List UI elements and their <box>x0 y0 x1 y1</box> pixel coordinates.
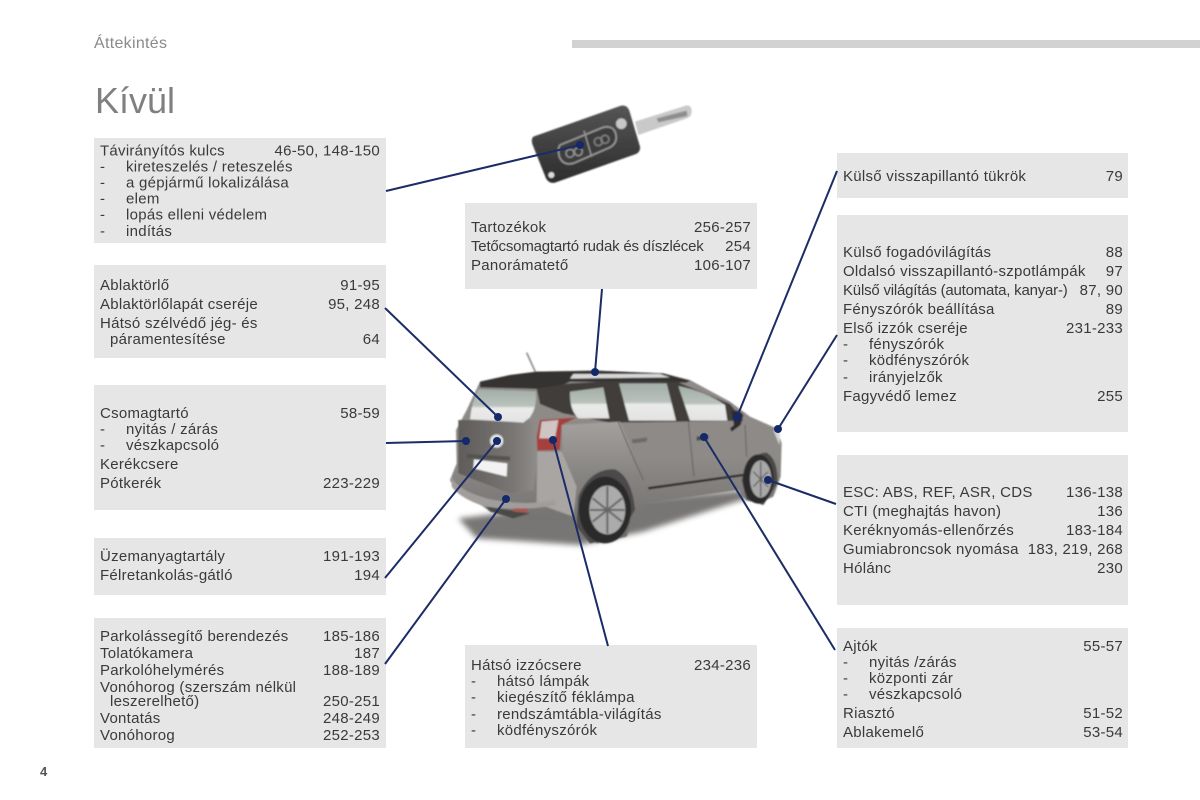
panel: lighting: 88 <box>1106 244 1123 261</box>
panel: rear bulbs: - <box>471 722 476 739</box>
door lines <box>618 422 747 480</box>
panel: lighting: Fagyvédő lemez <box>843 388 957 405</box>
panel: doors: 51-52 <box>1083 705 1123 722</box>
panel: mirrors: 79 <box>1106 168 1123 185</box>
panel: lighting: - <box>843 352 848 369</box>
panel: safety systems: Keréknyomás-ellenőrzés <box>843 522 1014 539</box>
panel: boot: Pótkerék <box>100 475 162 492</box>
panel: accessories: 106-107 <box>694 257 751 274</box>
panel: remote key: Távirányítós kulcs <box>100 142 225 160</box>
panel: rear bulbs: hátsó lámpák <box>497 673 590 690</box>
panel: doors: - <box>843 654 848 671</box>
panel: accessories <box>465 203 757 289</box>
license plate <box>473 459 507 477</box>
rear light <box>537 417 577 451</box>
panel: wiper: Ablaktörlőlapát cseréje <box>100 296 258 313</box>
panel: wiper: 95, 248 <box>328 296 380 313</box>
panel: remote key: - <box>100 223 105 240</box>
filler flap ring <box>490 434 503 448</box>
panel: remote key: 46-50, 148-150 <box>274 142 380 160</box>
rear wheel arch <box>577 469 635 543</box>
panel: safety systems: 136 <box>1097 503 1123 520</box>
ground shadow <box>458 488 778 545</box>
panel: doors: vészkapcsoló <box>869 686 962 703</box>
panel: wiper: páramentesítése <box>110 331 226 348</box>
callout lines and dots <box>385 141 837 664</box>
panel: safety systems <box>837 455 1128 605</box>
panel: fuel tank: Üzemanyagtartály <box>100 547 225 565</box>
panel: rear bulbs: - <box>471 673 476 690</box>
door handles <box>632 437 647 443</box>
panel: rear bulbs: kiegészítő féklámpa <box>497 689 635 706</box>
side window 3 <box>678 386 727 421</box>
panel: remote key: kireteszelés / reteszelés <box>126 158 293 176</box>
panel: remote key: indítás <box>126 223 172 240</box>
panel: wiper: Ablaktörlő <box>100 277 169 294</box>
front rim <box>750 460 771 498</box>
panel: lighting: 97 <box>1106 263 1123 280</box>
roof <box>480 371 690 389</box>
panel: parking: Parkolóhelymérés <box>100 662 224 679</box>
panel: lighting: Első izzók cseréje <box>843 320 968 337</box>
panel: remote key: - <box>100 190 105 208</box>
panel: lighting: Fényszórók beállítása <box>843 301 995 318</box>
panel: rear bulbs: rendszámtábla-világítás <box>497 706 662 723</box>
rear bumper quarter <box>537 452 577 517</box>
panel: parking: 185-186 <box>323 628 380 645</box>
headlamp edge <box>773 430 780 445</box>
panel: safety systems: 183-184 <box>1066 522 1123 539</box>
car body <box>450 371 782 543</box>
header bar <box>572 40 1200 48</box>
panel: remote key: a gépjármű lokalizálása <box>126 174 289 192</box>
panel: boot <box>94 385 386 510</box>
panel: lighting: ködfényszórók <box>869 352 969 369</box>
panel: boot: 223-229 <box>323 475 380 492</box>
page number: 4 <box>40 764 48 779</box>
panel: lighting: 255 <box>1097 388 1123 405</box>
panel: lighting: Külső fogadóvilágítás <box>843 244 991 261</box>
panel: parking: Parkolássegítő berendezés <box>100 628 289 645</box>
panel: parking <box>94 618 386 748</box>
panel: remote key: - <box>100 206 105 224</box>
rear tyre <box>579 477 631 543</box>
panel: parking: Vonóhorog <box>100 727 175 744</box>
panel: accessories: 254 <box>725 238 751 255</box>
antenna <box>527 353 536 373</box>
panel: rear bulbs <box>465 645 757 748</box>
panel: boot: - <box>100 421 105 438</box>
bumper <box>452 477 556 509</box>
panel: boot: nyitás / zárás <box>126 421 218 438</box>
panel: fuel tank: 194 <box>354 567 380 584</box>
panel: parking: 248-249 <box>323 710 380 727</box>
panel: rear bulbs: - <box>471 689 476 706</box>
panel: rear bulbs: 234-236 <box>694 657 751 674</box>
panel: doors: 55-57 <box>1083 638 1123 655</box>
panel: safety systems: 230 <box>1097 560 1123 577</box>
side rub strip <box>648 475 743 488</box>
tailgate trim <box>467 454 510 461</box>
panel: accessories: 256-257 <box>694 219 751 236</box>
panel: parking: 250-251 <box>323 693 380 710</box>
front wheel arch <box>742 453 777 505</box>
panel: wiper <box>94 265 386 358</box>
panel: boot: vészkapcsoló <box>126 437 219 454</box>
panel: remote key: elem <box>126 190 160 208</box>
panel: parking: 187 <box>354 645 380 662</box>
panel: doors: 53-54 <box>1083 724 1123 741</box>
panel: accessories: Tartozékok <box>471 219 546 236</box>
panel: remote key <box>94 138 386 243</box>
panel: safety systems: 136-138 <box>1066 484 1123 501</box>
panel: doors <box>837 628 1128 748</box>
panel: lighting: - <box>843 336 848 353</box>
rear rim <box>589 486 625 534</box>
panel: boot: Kerékcsere <box>100 456 179 473</box>
panel: wiper: 64 <box>363 331 380 348</box>
panel: fuel tank: 191-193 <box>323 548 380 565</box>
panel: mirrors: Külső visszapillantó tükrök <box>843 168 1026 185</box>
pillars <box>537 381 743 423</box>
panel: lighting: Oldalsó visszapillantó-szpotlámpák <box>843 263 1086 280</box>
panel: safety systems: Hólánc <box>843 560 892 577</box>
panel: rear bulbs: - <box>471 706 476 723</box>
panel: lighting: 89 <box>1106 301 1123 318</box>
illustration: car <box>450 353 782 545</box>
panel: parking: leszerelhető) <box>110 693 199 710</box>
panel: doors: Ablakemelő <box>843 724 924 741</box>
illustration: car key <box>532 105 692 183</box>
title: Kívül <box>95 80 175 121</box>
panel: parking: Tolatókamera <box>100 645 194 662</box>
panel: lighting: Külső világítás (automata, kanyar-) <box>843 282 1068 299</box>
panel: lighting: 231-233 <box>1066 320 1123 337</box>
panel: remote key: lopás elleni védelem <box>126 206 267 224</box>
panel: wiper: Hátsó szélvédő jég- és <box>100 315 258 332</box>
front tyre <box>743 454 774 504</box>
panel: doors: Riasztó <box>843 705 895 722</box>
panel: lighting: irányjelzők <box>869 369 943 386</box>
panel: parking: Vontatás <box>100 710 161 727</box>
panel: doors: - <box>843 686 848 703</box>
mirror <box>730 411 743 432</box>
panel: doors: központi zár <box>869 670 953 687</box>
rear window <box>470 389 536 423</box>
panel: lighting: fényszórók <box>869 336 944 353</box>
side window 2 <box>619 383 676 421</box>
panel: boot: Csomagtartó <box>100 405 189 422</box>
side window 1 <box>570 387 609 418</box>
panel: rear bulbs: ködfényszórók <box>497 722 597 739</box>
panel: parking: Vonóhorog (szerszám nélkül <box>100 679 296 696</box>
panel: boot: - <box>100 437 105 454</box>
panel: parking: 252-253 <box>323 727 380 744</box>
panel: wiper: 91-95 <box>340 277 380 294</box>
panel: fuel tank: Félretankolás-gátló <box>100 567 233 584</box>
panel: remote key: - <box>100 158 105 176</box>
panel: lighting <box>837 215 1128 432</box>
panel: accessories: Panorámatető <box>471 257 568 274</box>
panel: remote key: - <box>100 174 105 192</box>
panel: safety systems: CTI (meghajtás havon) <box>843 503 1001 520</box>
panel: doors: - <box>843 670 848 687</box>
panel: fuel tank <box>94 538 386 595</box>
rear quarter panel <box>562 422 643 483</box>
tailgate <box>458 420 537 493</box>
section label: Áttekintés <box>94 33 167 52</box>
panel: safety systems: Gumiabroncsok nyomása <box>843 541 1019 558</box>
panel: lighting: - <box>843 369 848 386</box>
panel: rear bulbs: Hátsó izzócsere <box>471 657 582 674</box>
panel: doors: nyitás /zárás <box>869 654 957 671</box>
panel: doors: Ajtók <box>843 638 878 655</box>
panel: accessories: Tetőcsomagtartó rudak és díszlécek <box>471 238 704 255</box>
panel: safety systems: 183, 219, 268 <box>1028 541 1123 558</box>
panel: boot: 58-59 <box>340 405 380 422</box>
panel: safety systems: ESC: ABS, REF, ASR, CDS <box>843 484 1033 501</box>
roof light strip <box>570 374 670 379</box>
panel: lighting: 87, 90 <box>1080 282 1123 299</box>
panel: mirrors <box>837 153 1128 198</box>
panel: parking: 188-189 <box>323 662 380 679</box>
